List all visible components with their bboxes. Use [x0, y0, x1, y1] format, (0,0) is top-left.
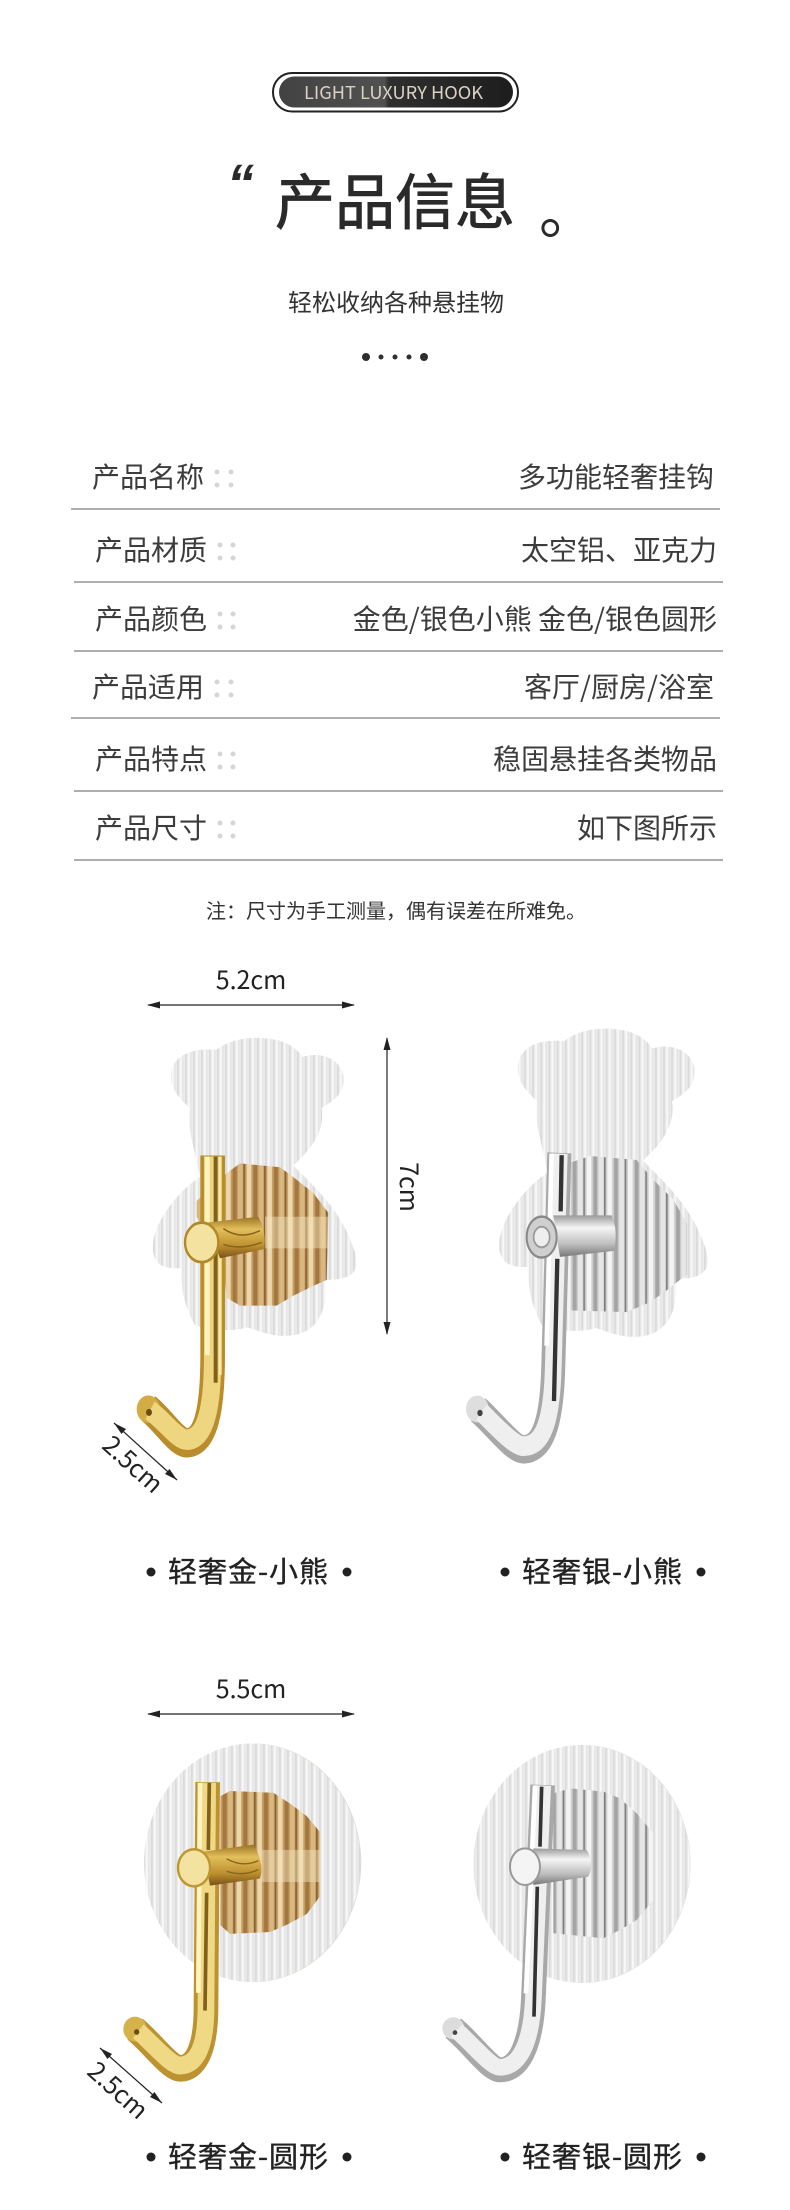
row: size: [74, 807, 723, 861]
row: colour: 金色/银色小熊 金色/银色圆形: [353, 598, 717, 638]
backing highlight band: [265, 1217, 328, 1248]
title: 。: [539, 166, 597, 250]
silver hook: [466, 1153, 562, 1449]
gold knob: [178, 1845, 261, 1886]
row: feature: [74, 738, 723, 792]
subtitle: 轻松收纳各种悬挂物: [288, 283, 504, 318]
badge: LIGHT LUXURY HOOK: LIGHT LUXURY HOOK: [304, 79, 483, 105]
row: size: 产品尺寸: [95, 807, 207, 847]
backing highlight band: [262, 1850, 320, 1882]
panel: gold bear hook: [95, 961, 428, 1591]
panel: gold round hook: [80, 1670, 361, 2176]
row: product name: [71, 456, 720, 510]
gold ribbed backing: [197, 1163, 328, 1306]
row: colour: [74, 598, 723, 652]
dimension: width 5.5cm: [147, 1670, 355, 1718]
gold hook: [123, 1782, 209, 2068]
row: usage: 产品适用: [92, 666, 204, 706]
silver knob: [527, 1215, 616, 1258]
gold knob: [185, 1217, 265, 1262]
caption: gold bear: 轻奢金-小熊: [168, 1549, 328, 1591]
row: material: 产品材质: [95, 529, 207, 569]
row: material: [74, 529, 723, 583]
product image: gold bear hook: [137, 1038, 356, 1443]
panel: product specification table: [71, 456, 723, 861]
row: size: 如下图所示: [577, 807, 717, 847]
note: 注：尺寸为手工测量，偶有误差在所难免。: [206, 895, 586, 924]
product image: gold round hook: [123, 1744, 361, 2068]
title: [227, 154, 597, 250]
panel: silver bear hook: [466, 1029, 708, 1591]
row: product name: 多功能轻奢挂钩: [518, 456, 714, 496]
silver hook: [442, 1785, 543, 2070]
row: usage: 客厅/厨房/浴室: [524, 666, 714, 706]
dimension: width 5.2cm: [147, 961, 355, 1008]
dot divider: [362, 353, 428, 361]
round acrylic plate: [473, 1745, 691, 1983]
row: usage: [71, 666, 720, 719]
gold hook: [137, 1155, 220, 1443]
row: material: 太空铝、亚克力: [521, 529, 717, 569]
title: 产品信息: [275, 155, 515, 242]
gold ribbed backing: [220, 1791, 320, 1934]
row: feature: 稳固悬挂各类物品: [493, 738, 717, 778]
row: product name: 产品名称: [92, 456, 204, 496]
dimension: width 5.5cm: 5.5cm: [216, 1670, 286, 1706]
title: “: [227, 154, 254, 214]
caption: gold round: 轻奢金-圆形: [168, 2134, 328, 2176]
icon: bear acrylic plate: [499, 1029, 708, 1337]
dimension: hook 2.5cm: 2.5cm: [80, 2053, 157, 2127]
dimension: hook 2.5cm: 2.5cm: [95, 1427, 172, 1501]
icon: bear acrylic plate: [153, 1038, 356, 1336]
silver knob: [510, 1848, 591, 1885]
row: colour: 产品颜色: [95, 598, 207, 638]
round acrylic plate: [144, 1744, 361, 1982]
product image: silver bear hook: [466, 1153, 687, 1449]
dimension: width 5.2cm: 5.2cm: [216, 961, 286, 997]
panel: silver round hook: [442, 1745, 706, 2176]
caption: silver bear: 轻奢银-小熊: [522, 1549, 682, 1591]
silver ribbed backing: [567, 1156, 687, 1312]
dimension: height 7cm: [384, 1037, 428, 1335]
row: feature: 产品特点: [95, 738, 207, 778]
badge: LIGHT LUXURY HOOK: [273, 73, 518, 112]
caption: silver round: 轻奢银-圆形: [522, 2134, 682, 2176]
dimension: height 7cm: 7cm: [392, 1162, 428, 1212]
product image: silver round hook: [442, 1745, 691, 2070]
silver ribbed backing: [553, 1788, 653, 1938]
